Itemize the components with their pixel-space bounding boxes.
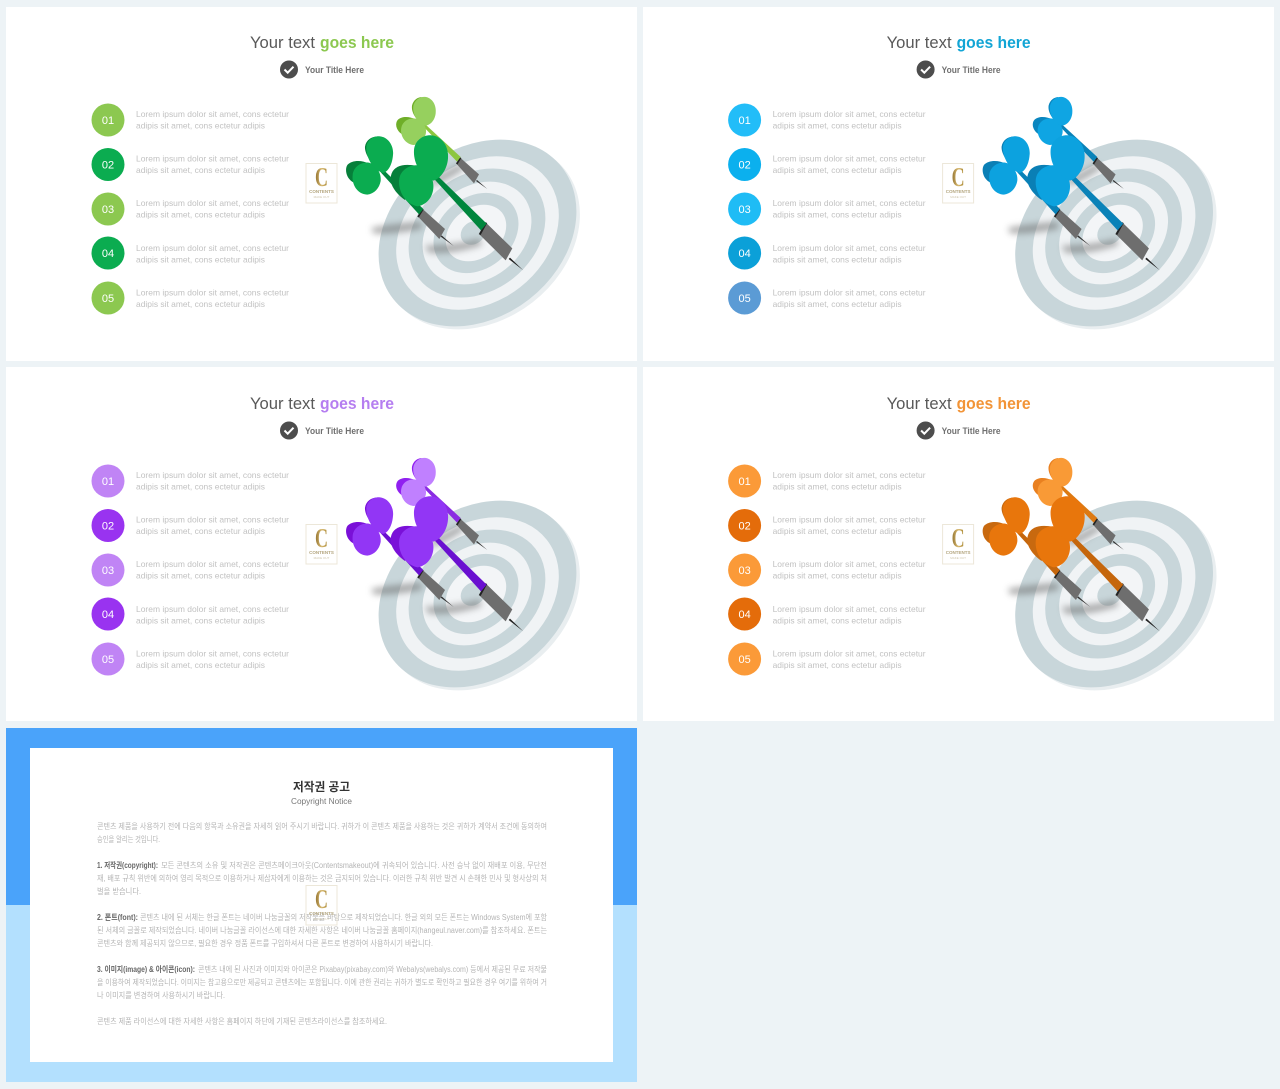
logo stamp: CONTENTS [309, 911, 334, 916]
closing line: 콘텐츠 제품 라이선스에 대한 자세한 사항은 홈페이지 하단에 기재된 콘텐츠라이선스를 참조하세요. [97, 1016, 387, 1026]
list item 01: 01 [102, 115, 114, 127]
logo stamp [306, 162, 337, 203]
subtitle with check icon: Your Title Here [305, 65, 364, 75]
panel: orange slide [643, 367, 1274, 729]
list item 03 [728, 192, 926, 226]
title: goes here [320, 33, 394, 52]
title: Your text [250, 33, 315, 52]
notice heading [291, 779, 353, 806]
list item 02: 02 [738, 160, 751, 172]
list item 04: 04 [102, 609, 114, 621]
target board [341, 101, 617, 368]
darts [983, 97, 1160, 270]
list item 01: adipis sit amet, cons ectetur adipis [773, 120, 902, 130]
list item 02 [728, 148, 926, 181]
logo stamp: C [315, 884, 328, 914]
title [887, 33, 1031, 52]
title: Your text [250, 394, 315, 413]
section 2: font: 콘텐츠와 함께 제공되지 않으므로, 필요한 경우 정품 폰트를 구입하셔서 다른 폰트로 변경하여 사용하시기 바랍니다. [97, 938, 433, 948]
logo stamp: C [315, 523, 328, 553]
list item 04: adipis sit amet, cons ectetur adipis [136, 254, 265, 264]
list item 01: 01 [738, 115, 751, 127]
target board [978, 101, 1254, 368]
list item 03: 03 [102, 204, 114, 216]
list item 04: Lorem ipsum dolor sit amet, cons ectetur [136, 604, 289, 614]
list item 05 [92, 282, 289, 314]
section 3: image and icon: 나 이미지를 변경하여 사용하시기 바랍니다. [97, 990, 225, 1000]
list item 03 [92, 554, 289, 586]
logo stamp: CONTENTS [946, 550, 970, 555]
title: goes here [320, 394, 394, 413]
list item 04: Lorem ipsum dolor sit amet, cons ectetur [136, 243, 289, 253]
section 1: copyright: 모든 콘텐츠의 소유 및 저작권은 콘텐츠메이크아웃(Contentsmakeout)에 귀속되어 있습니다. 사전 승낙 없이 재배포 이용, 무단전 [161, 860, 547, 870]
logo stamp: MAKE OUT [314, 195, 329, 199]
list item 05: 05 [102, 654, 114, 666]
panel: copyright notice [6, 728, 637, 1082]
list item 02: 02 [102, 160, 114, 172]
list item 03: Lorem ipsum dolor sit amet, cons ectetur [773, 559, 926, 569]
subtitle with check icon [280, 422, 364, 440]
list item 05: adipis sit amet, cons ectetur adipis [136, 660, 265, 670]
title: goes here [957, 33, 1031, 52]
title: Your text [887, 394, 952, 413]
list item 03: 03 [738, 204, 751, 216]
list item 02: 02 [738, 520, 751, 532]
list item 02: 02 [102, 520, 114, 532]
subtitle with check icon: Your Title Here [942, 426, 1001, 436]
logo stamp: MAKE OUT [314, 917, 329, 921]
logo stamp: CONTENTS [309, 550, 334, 555]
subtitle with check icon [280, 60, 364, 78]
intro paragraph [97, 821, 547, 844]
list item 02 [728, 509, 926, 542]
logo stamp: C [952, 162, 965, 192]
list item 01 [728, 464, 926, 498]
list item 03 [728, 554, 926, 586]
panel: blue slide [643, 7, 1274, 368]
logo stamp: MAKE OUT [314, 556, 329, 560]
section 3: image and icon: 을 이용하여 제작되었습니다. 이미지는 참고용으로만 제공되고 콘텐츠에는 포함됩니다. 이에 관한 권리는 귀하가 별도로 확인하고 필요한 경우 여기를 위하여 거 [97, 977, 547, 987]
logo stamp: MAKE OUT [950, 195, 966, 199]
list item 05: Lorem ipsum dolor sit amet, cons ectetur [773, 288, 926, 298]
list item 04: adipis sit amet, cons ectetur adipis [773, 254, 902, 264]
list item 04: adipis sit amet, cons ectetur adipis [773, 616, 902, 626]
subtitle with check icon: Your Title Here [942, 65, 1001, 75]
subtitle with check icon [917, 422, 1001, 440]
list item 05 [92, 642, 289, 676]
list item 02: adipis sit amet, cons ectetur adipis [773, 526, 902, 536]
list item 02: Lorem ipsum dolor sit amet, cons ectetur [773, 154, 926, 164]
target board [978, 462, 1254, 729]
subtitle with check icon [917, 60, 1001, 78]
list item 04 [92, 598, 289, 630]
list item 02: adipis sit amet, cons ectetur adipis [136, 526, 265, 536]
intro paragraph: 콘텐츠 제품을 사용하기 전에 다음의 항목과 소유권을 자세히 읽어 주시기 바랍니다. 귀하가 이 콘텐츠 제품을 사용하는 것은 귀하가 계약서 조건에 동의하여 [97, 821, 547, 831]
list item 05: adipis sit amet, cons ectetur adipis [136, 299, 265, 309]
intro paragraph: 승인을 알리는 것입니다. [97, 834, 160, 844]
list item 03: adipis sit amet, cons ectetur adipis [773, 570, 902, 580]
logo stamp: MAKE OUT [950, 556, 966, 560]
list item 02: adipis sit amet, cons ectetur adipis [773, 165, 902, 175]
list item 01: adipis sit amet, cons ectetur adipis [136, 120, 265, 130]
list item 03: Lorem ipsum dolor sit amet, cons ectetur [136, 198, 289, 208]
subtitle with check icon: Your Title Here [305, 426, 364, 436]
logo stamp: CONTENTS [946, 189, 970, 194]
section 2: font: 콘텐츠 내에 된 서체는 한글 폰트는 네이버 나눔글꼴의 저작물을 바탕으로 제작되었습니다. 한글 외의 모든 폰트는 Windows System에 포함 [140, 912, 548, 922]
list item 01: Lorem ipsum dolor sit amet, cons ectetur [136, 109, 289, 119]
list item 05: 05 [738, 293, 751, 305]
list item 02: adipis sit amet, cons ectetur adipis [136, 165, 265, 175]
list item 05: adipis sit amet, cons ectetur adipis [773, 660, 902, 670]
list item 04: Lorem ipsum dolor sit amet, cons ectetur [773, 243, 926, 253]
list item 03: 03 [102, 565, 114, 577]
section 3: image and icon: 3. 이미지(image) & 아이콘(icon): [97, 964, 195, 974]
section 1: copyright [97, 860, 547, 896]
list item 04 [92, 236, 289, 270]
list item 05: 05 [102, 293, 114, 305]
panel: green slide [6, 7, 637, 368]
list item 05: 05 [738, 654, 751, 666]
logo stamp: C [952, 523, 965, 553]
list item 01: 01 [102, 476, 114, 488]
section 2: font: 된 서체의 글꼴로 제작되었습니다. 네이버 나눔글꼴 라이선스에 대한 자세한 사항은 네이버 나눔글꼴 홈페이지(hangeul.naver.com)를 참조하세요. 폰트는 [97, 925, 547, 935]
list item 04: 04 [102, 248, 114, 260]
target board [341, 462, 617, 729]
list item 04 [728, 598, 926, 630]
list item 04 [728, 236, 926, 270]
title: goes here [957, 394, 1031, 413]
list item 05: Lorem ipsum dolor sit amet, cons ectetur [136, 648, 289, 658]
list item 02: Lorem ipsum dolor sit amet, cons ectetur [136, 514, 289, 524]
title [887, 394, 1031, 413]
title: Your text [887, 33, 952, 52]
list item 04: Lorem ipsum dolor sit amet, cons ectetur [773, 604, 926, 614]
logo stamp [943, 162, 974, 203]
list item 02: Lorem ipsum dolor sit amet, cons ectetur [136, 154, 289, 164]
list item 02 [92, 148, 289, 181]
list item 03: adipis sit amet, cons ectetur adipis [136, 570, 265, 580]
section 3: image and icon: 콘텐츠 내에 된 사진과 이미지와 아이콘은 Pixabay(pixabay.com)와 Webalys(webalys.com) 등에서 제공된 무료 저작물 [198, 964, 547, 974]
section 1: copyright: 1. 저작권(copyright): [97, 860, 158, 870]
list item 03: 03 [738, 565, 751, 577]
list item 01: 01 [738, 476, 751, 488]
panel: purple slide [6, 367, 637, 729]
list item 02: Lorem ipsum dolor sit amet, cons ectetur [773, 514, 926, 524]
list item 03: Lorem ipsum dolor sit amet, cons ectetur [136, 559, 289, 569]
list item 02 [92, 509, 289, 542]
logo stamp [306, 884, 337, 925]
notice heading: Copyright Notice [291, 797, 353, 806]
list item 01 [728, 104, 926, 136]
darts [983, 458, 1160, 631]
section 3: image and icon [97, 964, 547, 1000]
list item 03 [92, 192, 289, 226]
list item 01 [92, 104, 289, 136]
section 1: copyright: 벌을 받습니다. [97, 886, 141, 896]
logo stamp: C [315, 162, 328, 192]
list item 01: adipis sit amet, cons ectetur adipis [773, 482, 902, 492]
logo stamp [943, 523, 974, 564]
list item 01: adipis sit amet, cons ectetur adipis [136, 482, 265, 492]
section 2: font [97, 912, 548, 948]
section 2: font: 2. 폰트(font): [97, 913, 138, 922]
section 1: copyright: 재, 배포 규칙 위반에 의하여 영리 목적으로 이용하거나 제삼자에게 이용하는 것은 금지되어 있습니다. 이러한 규칙 위반 발견 시 손해한 민사 및 형사상의 처 [97, 873, 547, 883]
logo stamp [306, 523, 337, 564]
list item 05: Lorem ipsum dolor sit amet, cons ectetur [773, 648, 926, 658]
list item 04: 04 [738, 248, 751, 260]
list item 03: adipis sit amet, cons ectetur adipis [136, 210, 265, 220]
title [250, 394, 394, 413]
logo stamp: CONTENTS [309, 189, 334, 194]
list item 05: adipis sit amet, cons ectetur adipis [773, 299, 902, 309]
list item 01 [92, 464, 289, 498]
notice heading: 저작권 공고 [293, 779, 350, 794]
list item 01: Lorem ipsum dolor sit amet, cons ectetur [773, 109, 926, 119]
darts [346, 458, 523, 631]
list item 01: Lorem ipsum dolor sit amet, cons ectetur [773, 470, 926, 480]
list item 03: adipis sit amet, cons ectetur adipis [773, 210, 902, 220]
darts [346, 97, 523, 270]
list item 05: Lorem ipsum dolor sit amet, cons ectetur [136, 288, 289, 298]
list item 01: Lorem ipsum dolor sit amet, cons ectetur [136, 470, 289, 480]
list item 04: adipis sit amet, cons ectetur adipis [136, 616, 265, 626]
list item 04: 04 [738, 609, 751, 621]
title [250, 33, 394, 52]
list item 05 [728, 642, 926, 676]
list item 05 [728, 282, 926, 314]
list item 03: Lorem ipsum dolor sit amet, cons ectetur [773, 198, 926, 208]
